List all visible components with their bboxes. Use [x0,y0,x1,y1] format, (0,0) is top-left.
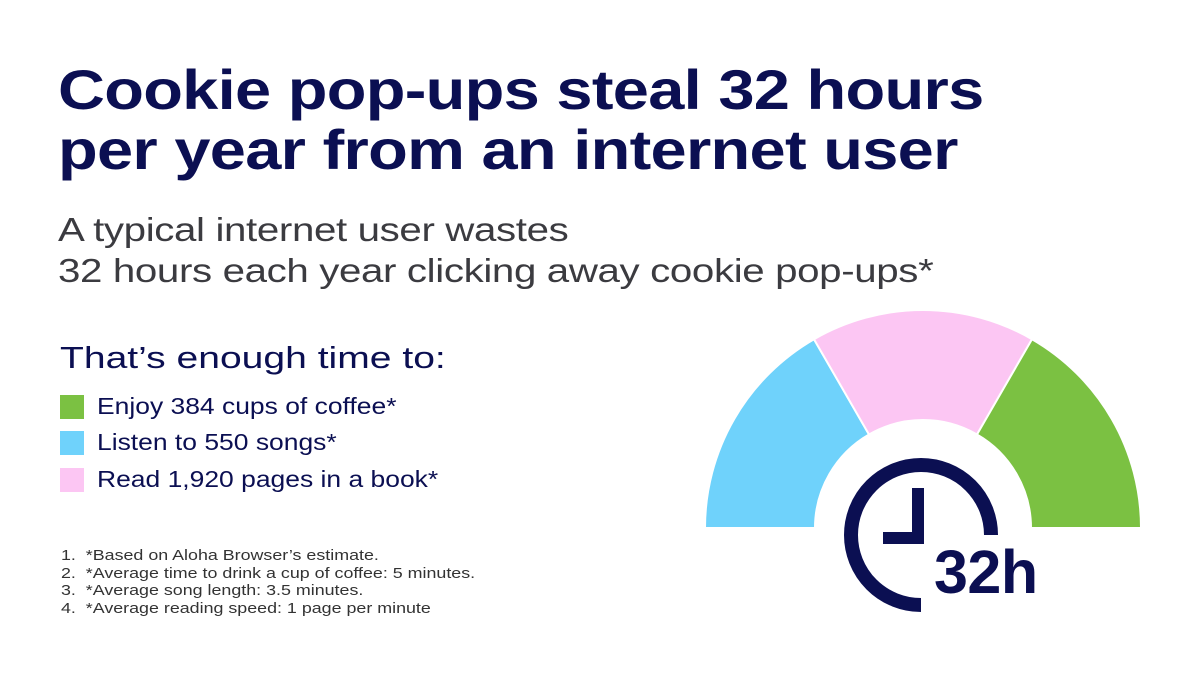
segment: coffee [977,339,1141,528]
heading: enough time: That’s enough time to: [60,340,446,375]
subtitle [58,211,934,289]
footnotes [61,547,475,616]
label: 32h: 32h [934,538,1038,606]
title [58,58,984,181]
segment: pages [814,310,1032,434]
icon: clock [851,465,991,605]
item: coffee [60,393,397,419]
item: songs [60,429,337,455]
footnotes: 4. *Average reading speed: 1 page per minute [61,600,431,616]
footnotes: 2. *Average time to drink a cup of coffee: 5 minutes. [61,564,475,582]
subtitle: 32 hours each year clicking away cookie pop-ups* [58,252,933,289]
footnotes: 1. *Based on Aloha Browser’s estimate. [61,547,379,564]
subtitle: A typical internet user wastes [58,211,568,248]
list: Read 1,920 pages in a book* [97,466,438,492]
footnotes: 3. *Average song length: 3.5 minutes. [61,582,363,599]
segment: songs [705,339,869,528]
item: pages [60,466,438,492]
list: Enjoy 384 cups of coffee* [97,393,397,419]
title: per year from an internet user [58,118,958,181]
title: Cookie pop-ups steal 32 hours [58,58,984,121]
list [60,393,438,492]
list: Listen to 550 songs* [97,429,337,455]
